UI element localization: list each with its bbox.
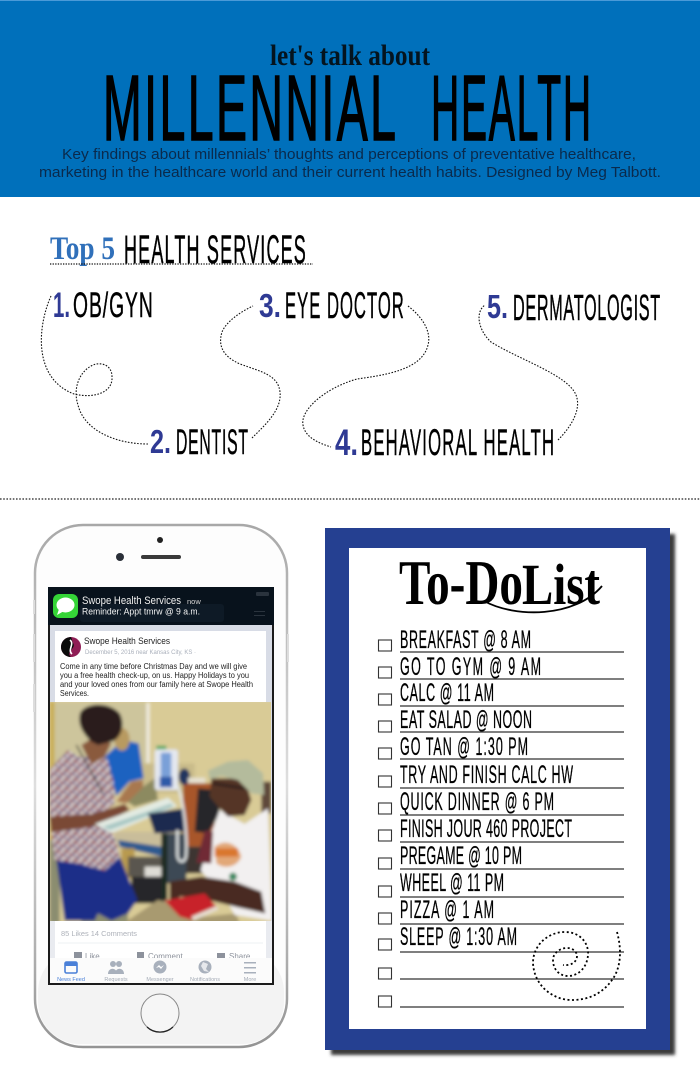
- task: salad: [378, 706, 624, 734]
- task: pregame: [378, 842, 624, 870]
- intro text: Key findings about millennials’ thoughts and perceptions of preventative healthcare,: [62, 146, 636, 163]
- notification bar: Swope Health Services: [82, 595, 181, 607]
- task: tan: [378, 733, 624, 761]
- likes and actions area: Comment: [148, 952, 183, 961]
- task: dinner: QUICK DINNER @ 6 PM: [400, 788, 554, 816]
- header banner: [0, 0, 700, 197]
- item 3: Eye Doctor: EYE DOCTOR: [285, 286, 404, 327]
- notepad border: [325, 528, 670, 1050]
- heading: Top 5 Health Services: Top 5: [50, 231, 115, 267]
- likes and actions area: 85 Likes 14 Comments: [61, 931, 138, 938]
- task: pizza: [378, 896, 624, 924]
- patient sleeve: [196, 831, 213, 863]
- task: salad: EAT SALAD @ NOON: [400, 706, 532, 734]
- to-do list notepad: [325, 528, 675, 1055]
- post card: [55, 631, 266, 702]
- tab bar: [50, 958, 272, 983]
- patient trousers: [125, 900, 240, 924]
- item 5: Dermatologist: 5.: [487, 288, 508, 325]
- likes and actions area: Share: [229, 952, 251, 961]
- icon: more: [244, 962, 256, 974]
- phone mockup: [33, 525, 289, 1047]
- phone body: [33, 525, 289, 1047]
- notepad shadow: [331, 534, 675, 1055]
- eyebrow: let's talk about: let's talk about: [270, 39, 430, 72]
- photo: nurse with patient: [48, 700, 275, 927]
- icon: messenger: [154, 960, 166, 974]
- item 1: OB/GYN: OB/GYN: [73, 285, 153, 324]
- icon: news feed: [65, 962, 77, 973]
- item 3: Eye Doctor: 3.: [259, 287, 281, 324]
- item 1: OB/GYN: 1.: [53, 286, 70, 325]
- tab bar: Notifications: [190, 977, 220, 983]
- intro text: marketing in the healthcare world and their current health habits. Designed by Meg Talbott.: [39, 164, 661, 181]
- tab bar: Messenger: [146, 977, 174, 983]
- item 5: Dermatologist: DERMATOLOGIST: [513, 288, 660, 328]
- task: calc homework: TRY AND FINISH CALC HW: [400, 761, 573, 789]
- connector 2 to 3: [221, 306, 280, 438]
- title: Millennial Health: [103, 55, 591, 161]
- icon: notifications: [198, 960, 212, 974]
- red pouch: [165, 893, 218, 920]
- tab bar: News Feed: [57, 977, 85, 983]
- tab bar: Requests: [104, 977, 128, 983]
- item 2: Dentist: DENTIST: [176, 422, 248, 462]
- task: breakfast: [378, 626, 624, 654]
- notification bar: Reminder: Appt tmrw @ 9 a.m.: [82, 606, 200, 616]
- paperwork: [95, 798, 177, 833]
- connector 3 to 4: [303, 306, 429, 447]
- heading: Top 5 Health Services: [50, 227, 313, 272]
- home button: [141, 994, 179, 1032]
- task: calc: CALC @ 11 AM: [400, 679, 494, 707]
- heading: To-Do List: List: [522, 552, 601, 617]
- patient arm: [170, 877, 265, 913]
- dotted spiral doodle: [533, 932, 620, 1000]
- tab bar: More: [244, 977, 256, 983]
- title: Millennial Health: MILLENNIAL: [103, 55, 396, 160]
- checklist rows: [378, 626, 624, 1007]
- ranked list of health services: [41, 285, 660, 464]
- nurse arm: [50, 804, 130, 832]
- patient shirt: [201, 808, 272, 921]
- task: dinner: [378, 788, 624, 816]
- task: gym: [378, 653, 624, 681]
- task: wheel: [378, 869, 624, 897]
- colleague: [105, 740, 144, 796]
- item 4: Behavioral Health: 4.: [335, 422, 358, 463]
- nurse top: [50, 750, 120, 871]
- heading: Top 5 Health Services: HEALTH SERVICES: [124, 227, 306, 272]
- task: tan: GO TAN @ 1:30 PM: [400, 733, 528, 761]
- notification bar: now: [187, 597, 201, 606]
- notification bar: [48, 587, 274, 625]
- post card: and your loved ones from our family here at Swope Health: [60, 680, 253, 689]
- task: pizza: PIZZA @ 1 AM: [400, 896, 494, 924]
- task: gym: GO TO GYM @ 9 AM: [400, 653, 541, 681]
- vitals monitor: [148, 746, 186, 900]
- post card: you a free health check-up, on us. Happy Holidays to you: [60, 671, 249, 680]
- post card: Services.: [60, 689, 89, 698]
- likes and actions area: Like: [85, 952, 100, 961]
- icon: Swope logo: [61, 637, 81, 657]
- task: sleep: [378, 923, 624, 952]
- task: breakfast: BREAKFAST @ 8 AM: [400, 626, 531, 654]
- task: wheel: WHEEL @ 11 PM: [400, 869, 504, 897]
- connector 4 to 5: [479, 305, 578, 440]
- post card: December 5, 2016 near Kansas City, KS ·: [85, 649, 196, 656]
- connector 1 to 2: [41, 296, 148, 444]
- nurse pants: [56, 857, 137, 921]
- likes and actions area: [50, 921, 272, 961]
- task: sleep: SLEEP @ 1:30 AM: [400, 923, 517, 951]
- bed and cart: [114, 832, 163, 848]
- intro text: [39, 146, 661, 181]
- patient cap: [208, 760, 264, 795]
- icon: requests: [108, 961, 124, 974]
- item 4: Behavioral Health: BEHAVIORAL HEALTH: [361, 423, 554, 464]
- post card: Swope Health Services: [84, 636, 170, 647]
- task: pregame: PREGAME @ 10 PM: [400, 842, 522, 870]
- post card: Come in any time before Christmas Day and we will give: [60, 662, 248, 671]
- mottled fabric: [125, 778, 158, 807]
- task: calc: [378, 679, 624, 707]
- item 2: Dentist: 2.: [150, 423, 171, 460]
- heading: To-Do List: To-Do: [399, 547, 523, 618]
- camera and speaker: [116, 537, 181, 561]
- icon: messages: [53, 594, 78, 618]
- patient head: [210, 778, 251, 817]
- title: Millennial Health: HEALTH: [431, 57, 591, 161]
- empty row 2: [378, 996, 624, 1007]
- task: project: FINISH JOUR 460 PROJECT: [400, 815, 572, 843]
- notepad paper: [349, 548, 646, 1029]
- empty row 1: [378, 968, 624, 979]
- phone screen: [48, 587, 275, 985]
